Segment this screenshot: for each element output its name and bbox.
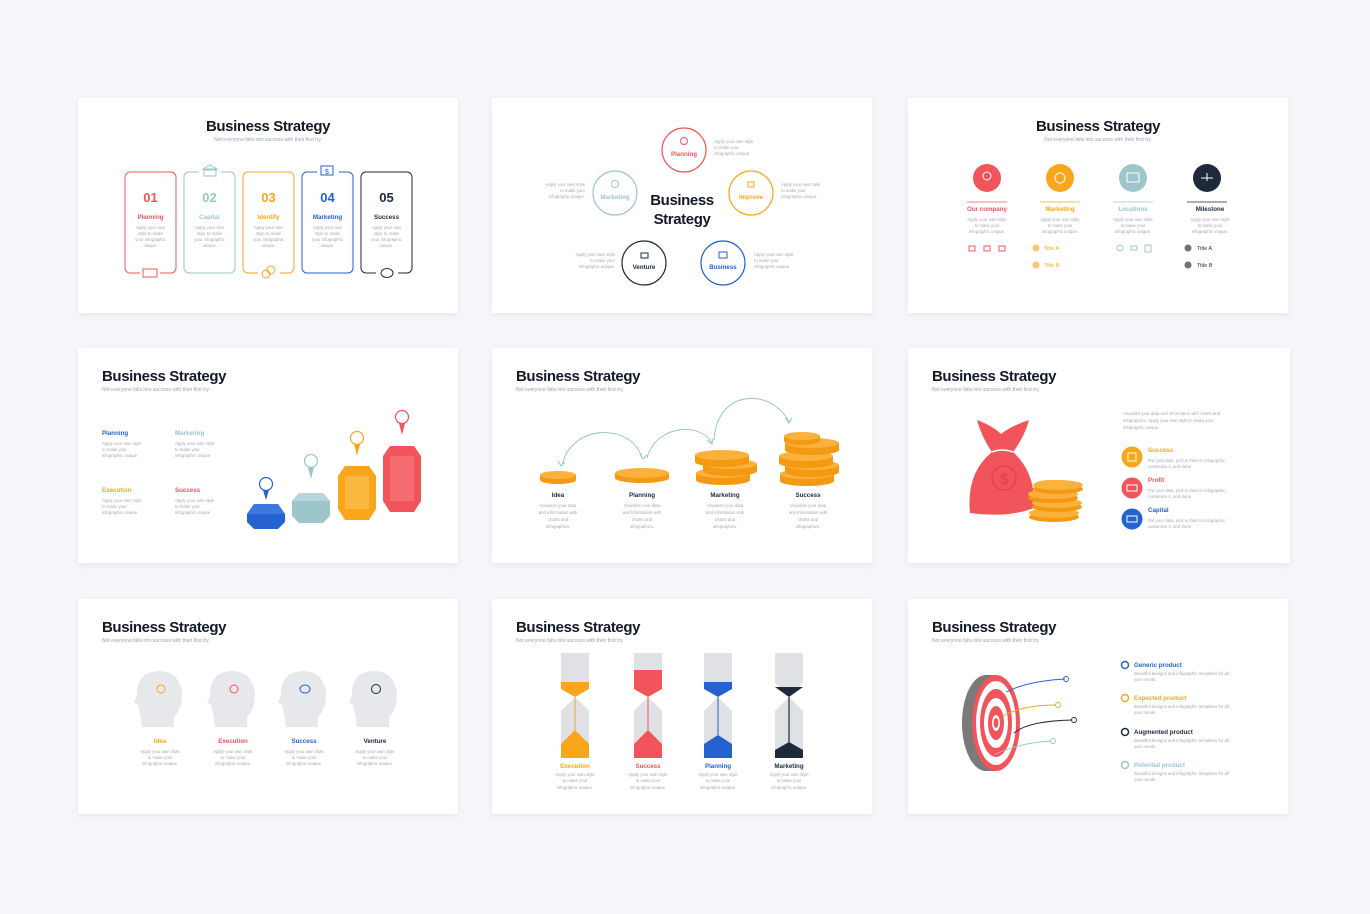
- item profit: customize it, and done: [1148, 494, 1192, 499]
- title: Business Strategy: [102, 368, 227, 385]
- slide 1: five step cards: [78, 98, 458, 313]
- subtitle: Not everyone falls into success with their first try.: [932, 638, 1040, 644]
- item capital: Put your data, pick a chart or infographic,: [1148, 518, 1226, 523]
- head success: [278, 671, 326, 766]
- coin stack marketing: infographics.: [713, 524, 737, 529]
- column marketing: Apply your own style: [1040, 217, 1080, 222]
- title: Business Strategy: [932, 368, 1057, 385]
- gem blue: [247, 478, 285, 529]
- node venture: to make your: [590, 258, 616, 263]
- card 05 success: Apply your own: [372, 225, 402, 230]
- gem red: [383, 410, 421, 512]
- card 05 success: [361, 172, 412, 280]
- intro text: infographics. Apply your own style to make your: [1123, 418, 1214, 423]
- coin stack planning: and information with: [623, 510, 662, 515]
- hourglass planning: Planning: [705, 763, 731, 770]
- head execution: Apply your own style: [213, 749, 253, 754]
- hourglass planning: Apply your own style: [698, 772, 738, 777]
- coin stack planning: infographics.: [630, 524, 654, 529]
- hourglass marketing: infographic unique.: [771, 785, 807, 790]
- slide 6: money bag: [908, 348, 1290, 563]
- text execution: Execution: [102, 487, 132, 494]
- head idea: Apply your own style: [140, 749, 180, 754]
- slide 3: four milestones: [908, 98, 1288, 313]
- head idea: to make your: [148, 755, 173, 760]
- hourglass success: Apply your own style: [628, 772, 668, 777]
- node venture: [576, 241, 666, 285]
- hourglass success: infographic unique.: [630, 785, 666, 790]
- slide 5: coin stacks: [492, 348, 872, 563]
- text planning: infographic unique: [102, 453, 138, 458]
- item augmented product: Beautiful designs and infographic templates for all: [1134, 738, 1229, 743]
- card 02 capital: style to make: [197, 231, 223, 236]
- arrows: [994, 676, 1076, 755]
- coin stack marketing: and information with: [706, 510, 745, 515]
- node planning: to make your: [714, 145, 739, 150]
- node marketing: to make your: [560, 188, 586, 193]
- text planning: Planning: [102, 430, 128, 437]
- node improve: Apply your own style: [781, 182, 821, 187]
- card 03 identify: unique.: [261, 243, 276, 248]
- slide 7: heads: [78, 599, 458, 814]
- subtitle: Not everyone falls into success with their first try.: [516, 638, 624, 644]
- item augmented product: [1122, 728, 1229, 749]
- column milestone: Title A: [1197, 246, 1212, 252]
- title: Business Strategy: [1036, 118, 1161, 135]
- gem teal: [292, 454, 330, 523]
- card 01 planning: Planning: [137, 214, 164, 221]
- hourglass planning: [698, 653, 738, 790]
- hourglass execution: infographic unique.: [557, 785, 593, 790]
- node venture: Venture: [633, 264, 656, 271]
- column marketing: infographic unique.: [1042, 229, 1078, 234]
- item potential product: Potential product: [1134, 762, 1185, 769]
- hourglass execution: [555, 653, 595, 790]
- coin stack marketing: Visualize your data: [707, 503, 744, 508]
- target board: [962, 675, 1020, 771]
- item generic product: Beautiful designs and infographic templates for all: [1134, 671, 1229, 676]
- card 03 identify: style to make: [256, 231, 282, 236]
- head success: Apply your own style: [284, 749, 324, 754]
- coins: [1028, 480, 1083, 522]
- card 01 planning: your infographic: [135, 237, 167, 242]
- column our company: Apply your own style: [967, 217, 1007, 222]
- column our company: Our company: [967, 206, 1007, 213]
- card 04 marketing: [302, 164, 353, 273]
- column marketing: Title B: [1044, 263, 1060, 269]
- node business: infographic unique.: [754, 264, 790, 269]
- item expected product: Beautiful designs and infographic templates for all: [1134, 704, 1229, 709]
- card 05 success: Success: [374, 214, 400, 221]
- column marketing: to make your: [1048, 223, 1073, 228]
- intro text: infographic unique.: [1123, 425, 1159, 430]
- column our company: [967, 164, 1007, 251]
- item potential product: Beautiful designs and infographic templates for all: [1134, 771, 1229, 776]
- coin stack success: Success: [795, 492, 821, 499]
- column marketing: Marketing: [1045, 206, 1075, 213]
- title: Business Strategy: [516, 368, 641, 385]
- text execution: [102, 487, 142, 515]
- card 05 success: 05: [379, 190, 394, 205]
- column locations: Locations: [1118, 206, 1148, 213]
- item expected product: your needs.: [1134, 710, 1156, 715]
- coin stack success: infographics.: [796, 524, 820, 529]
- head idea: Idea: [154, 738, 167, 745]
- node marketing: infographic unique.: [549, 194, 585, 199]
- card 03 identify: 03: [261, 190, 276, 205]
- coin stack marketing: Marketing: [710, 492, 740, 499]
- money bag: [969, 420, 1034, 515]
- coin stack idea: Idea: [552, 492, 565, 499]
- card 03 identify: Apply your own: [254, 225, 284, 230]
- hourglass planning: to make your: [706, 778, 731, 783]
- text execution: Apply your own style: [102, 498, 142, 503]
- text planning: to make your: [102, 447, 127, 452]
- coin stack planning: [615, 468, 669, 529]
- node improve: to make your: [781, 188, 806, 193]
- text execution: to make your: [102, 504, 127, 509]
- column milestone: Milestone: [1196, 206, 1225, 213]
- coin stack idea: and information with: [539, 510, 578, 515]
- hourglass planning: infographic unique.: [700, 785, 736, 790]
- coin stack planning: Visualize your data: [624, 503, 661, 508]
- item capital: customize it, and done: [1148, 524, 1192, 529]
- subtitle: Not everyone falls into success with their first try.: [102, 387, 210, 393]
- card 02 capital: 02: [202, 190, 217, 205]
- hourglass success: to make your: [636, 778, 661, 783]
- column locations: infographic unique.: [1115, 229, 1151, 234]
- card 02 capital: Capital: [199, 214, 220, 221]
- coin stack planning: Planning: [629, 492, 655, 499]
- center title: Business: [650, 192, 714, 209]
- column milestone: [1184, 164, 1230, 269]
- card 04 marketing: 04: [320, 190, 335, 205]
- gem orange: [338, 432, 376, 520]
- item generic product: Generic product: [1134, 662, 1182, 669]
- title: Business Strategy: [932, 619, 1057, 636]
- title: Business Strategy: [102, 619, 227, 636]
- hourglass marketing: [769, 653, 809, 790]
- text marketing: Marketing: [175, 430, 204, 437]
- head venture: infographic unique.: [357, 761, 393, 766]
- coin stack marketing: [695, 450, 757, 529]
- node planning: Planning: [671, 151, 697, 158]
- column milestone: infographic unique.: [1192, 229, 1228, 234]
- column milestone: Apply your own style: [1190, 217, 1230, 222]
- card 02 capital: your infographic: [194, 237, 226, 242]
- head venture: [349, 671, 397, 766]
- node improve: Improve: [739, 194, 764, 201]
- hourglass marketing: Marketing: [774, 763, 804, 770]
- text marketing: infographic unique: [175, 453, 211, 458]
- item success: [1122, 446, 1226, 469]
- column our company: infographic unique.: [969, 229, 1005, 234]
- subtitle: Not everyone falls into success with their first try.: [1044, 137, 1152, 143]
- item augmented product: Augmented product: [1134, 729, 1193, 736]
- node improve: infographic unique.: [781, 194, 817, 199]
- hourglass execution: Execution: [560, 763, 590, 770]
- item generic product: your needs.: [1134, 677, 1156, 682]
- coin stack idea: infographics.: [546, 524, 570, 529]
- title: Business Strategy: [516, 619, 641, 636]
- item success: customize it, and done: [1148, 464, 1192, 469]
- slide 4: gem growth: [78, 348, 458, 563]
- coin stack idea: charts and: [548, 517, 569, 522]
- node venture: infographic unique.: [579, 264, 615, 269]
- node business: to make your: [754, 258, 779, 263]
- slide 2: circle cycle: Strategy: [654, 211, 711, 228]
- head execution: Execution: [218, 738, 248, 745]
- coin stack marketing: charts and: [715, 517, 736, 522]
- item profit: Profit: [1148, 477, 1164, 484]
- head success: to make your: [292, 755, 317, 760]
- item profit: [1122, 477, 1226, 499]
- card 03 identify: your infographic: [253, 237, 285, 242]
- coin stack success: Visualize your data: [790, 503, 827, 508]
- node improve: [729, 171, 821, 215]
- card 02 capital: Apply your own: [195, 225, 225, 230]
- hourglass success: Success: [635, 763, 661, 770]
- item potential product: [1122, 762, 1229, 782]
- node planning: infographic unique.: [714, 151, 750, 156]
- head idea: [134, 671, 182, 766]
- item capital: Capital: [1148, 507, 1169, 514]
- item capital: [1122, 507, 1226, 530]
- hourglass success: [628, 653, 668, 790]
- item expected product: Expected product: [1134, 695, 1186, 702]
- card 02 capital: unique.: [202, 243, 217, 248]
- head success: infographic unique.: [286, 761, 322, 766]
- card 04 marketing: Apply your own: [313, 225, 343, 230]
- card 05 success: style to make: [374, 231, 400, 236]
- text success: [175, 487, 215, 515]
- node business: Business: [709, 264, 737, 271]
- coin stack success: [779, 432, 839, 529]
- card 04 marketing: your infographic: [312, 237, 344, 242]
- money bag: $: [1000, 471, 1009, 488]
- node planning: [662, 128, 754, 172]
- column our company: to make your: [975, 223, 1000, 228]
- column locations: [1113, 164, 1153, 252]
- card 01 planning: [125, 172, 176, 278]
- head execution: infographic unique.: [215, 761, 251, 766]
- node marketing: Apply your own style: [546, 182, 586, 187]
- card 04 marketing: Marketing: [313, 214, 342, 221]
- title: Business Strategy: [206, 118, 331, 135]
- card 01 planning: 01: [143, 190, 158, 205]
- column milestone: Title B: [1197, 263, 1213, 269]
- text planning: Apply your own style: [102, 441, 142, 446]
- head idea: infographic unique.: [142, 761, 178, 766]
- subtitle: Not everyone falls into success with their first try.: [932, 387, 1040, 393]
- column locations: Apply your own style: [1113, 217, 1153, 222]
- column marketing: [1032, 164, 1080, 269]
- card 04 marketing: unique.: [320, 243, 335, 248]
- node marketing: [546, 171, 637, 215]
- slide 2: circle cycle: [492, 98, 872, 313]
- card 02 capital: [184, 165, 235, 273]
- column locations: to make your: [1121, 223, 1146, 228]
- coin stack idea: Visualize your data: [540, 503, 577, 508]
- card 01 planning: unique.: [143, 243, 158, 248]
- column milestone: to make your: [1198, 223, 1223, 228]
- card 05 success: unique.: [379, 243, 394, 248]
- hourglass marketing: to make your: [777, 778, 802, 783]
- hourglass marketing: Apply your own style: [769, 772, 809, 777]
- text success: Apply your own style: [175, 498, 215, 503]
- item success: Success: [1148, 447, 1174, 454]
- head venture: Venture: [364, 738, 387, 745]
- text success: to make your: [175, 504, 200, 509]
- item profit: Put your data, pick a chart or infographic,: [1148, 488, 1226, 493]
- card 01 planning: style to make: [138, 231, 164, 236]
- text planning: [102, 430, 142, 458]
- column marketing: Title A: [1044, 246, 1059, 252]
- item expected product: [1122, 694, 1229, 715]
- coin stack planning: charts and: [632, 517, 653, 522]
- head success: Success: [291, 738, 317, 745]
- text success: Success: [175, 487, 201, 494]
- intro text: [1123, 411, 1221, 430]
- subtitle: Not everyone falls into success with their first try.: [516, 387, 624, 393]
- node business: [701, 241, 794, 285]
- head execution: [207, 671, 255, 766]
- text success: infographic unique: [175, 510, 211, 515]
- coin stack success: charts and: [798, 517, 819, 522]
- hourglass execution: to make your: [563, 778, 588, 783]
- card 05 success: your infographic: [371, 237, 403, 242]
- subtitle: Not everyone falls into success with their first try.: [214, 137, 322, 143]
- coin stack success: and information with: [789, 510, 828, 515]
- card 01 planning: Apply your own: [136, 225, 166, 230]
- node venture: Apply your own style: [576, 252, 616, 257]
- card 03 identify: [243, 172, 294, 280]
- item generic product: [1122, 662, 1229, 682]
- head venture: Apply your own style: [355, 749, 395, 754]
- item potential product: your needs.: [1134, 777, 1156, 782]
- card 03 identify: Identify: [257, 214, 280, 221]
- card 04 marketing: $: [325, 169, 329, 176]
- card 04 marketing: style to make: [315, 231, 341, 236]
- hourglass execution: Apply your own style: [555, 772, 595, 777]
- text marketing: to make your: [175, 447, 200, 452]
- intro text: Visualize your data and information with charts and: [1123, 411, 1221, 416]
- coin stack idea: [539, 471, 578, 529]
- subtitle: Not everyone falls into success with their first try.: [102, 638, 210, 644]
- arrows arcs: [558, 398, 792, 466]
- slide 9: target: [908, 599, 1288, 814]
- head venture: to make your: [363, 755, 388, 760]
- item augmented product: your needs.: [1134, 744, 1156, 749]
- text marketing: [175, 430, 215, 458]
- node marketing: Marketing: [600, 194, 630, 201]
- text execution: infographic unique: [102, 510, 138, 515]
- item success: Put your data, pick a chart or infographic,: [1148, 458, 1226, 463]
- node business: Apply your own style: [754, 252, 794, 257]
- node planning: Apply your own style: [714, 139, 754, 144]
- text marketing: Apply your own style: [175, 441, 215, 446]
- head execution: to make your: [221, 755, 246, 760]
- slide 8: hourglasses: [492, 599, 872, 814]
